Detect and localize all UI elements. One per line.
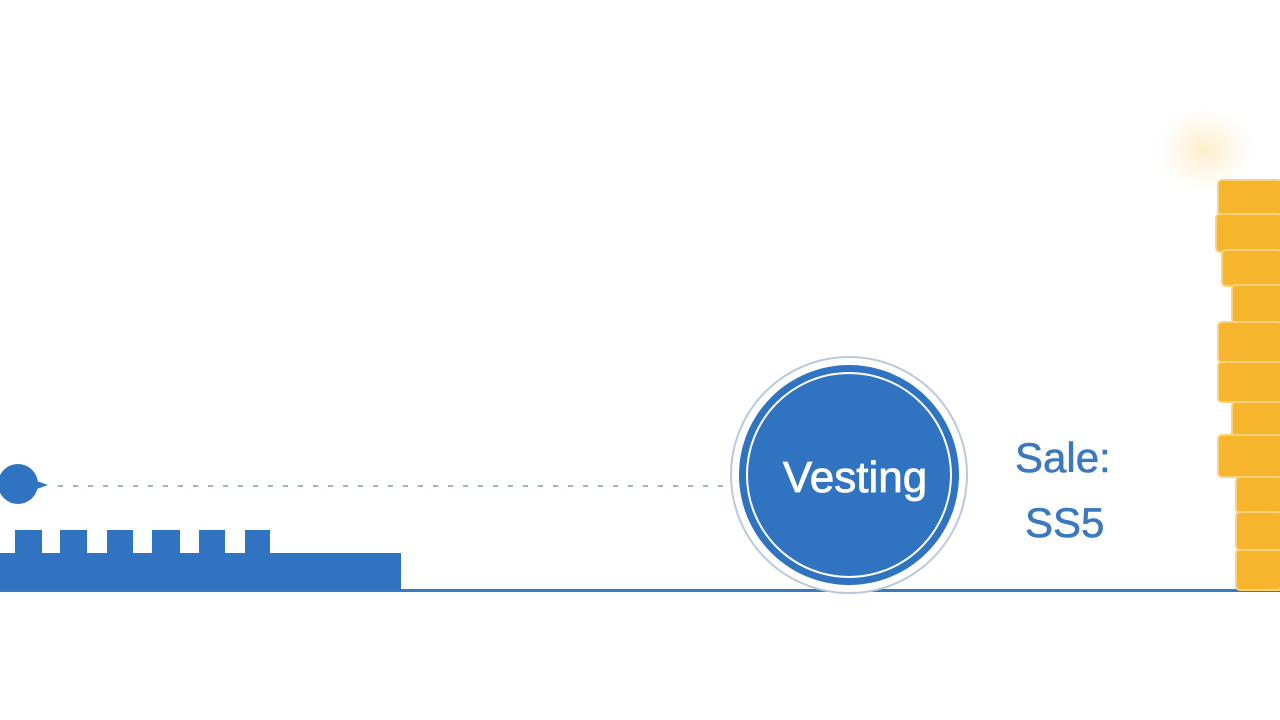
sale label: Sale: — [1015, 434, 1111, 481]
vesting circle — [731, 357, 967, 593]
baseline — [0, 589, 1280, 592]
marker dot — [0, 464, 48, 504]
bar block — [0, 530, 401, 590]
sparkle glow — [1150, 105, 1260, 195]
sale label: SS5 — [1025, 499, 1104, 546]
sale label — [1015, 434, 1111, 546]
vesting circle: Vesting — [783, 453, 927, 502]
coin stack — [1216, 180, 1280, 590]
dotted line — [58, 485, 726, 487]
